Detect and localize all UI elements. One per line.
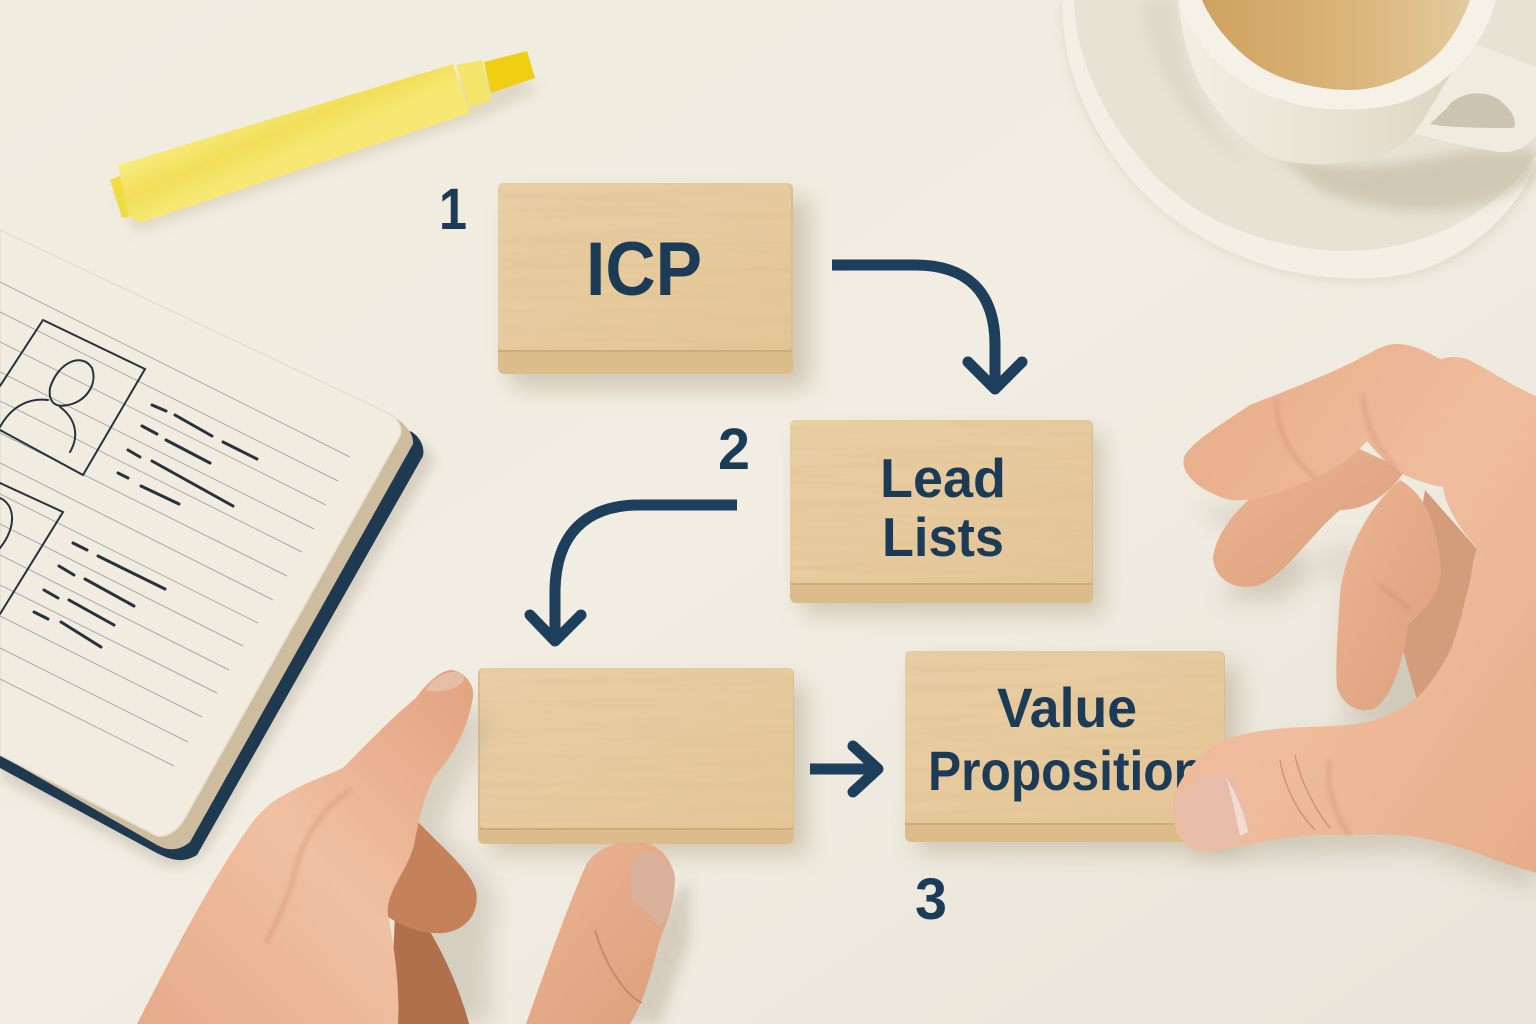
highlighter collar	[456, 60, 492, 108]
block: Value Proposition: Value	[997, 676, 1137, 739]
left middle finger	[385, 800, 477, 933]
notebook cover	[0, 431, 423, 860]
saucer and coffee cup	[1062, 0, 1536, 281]
left hand back and index finger	[137, 670, 473, 1024]
notebook top page	[0, 230, 401, 836]
block: ICP	[498, 183, 810, 388]
left thumb	[526, 842, 675, 1024]
left ring finger	[390, 915, 469, 1024]
block: Lead Lists	[790, 420, 1102, 614]
index fingernail	[425, 672, 464, 692]
cup body	[1178, 0, 1496, 164]
notebook handwriting	[34, 405, 257, 647]
step number 3: 3	[915, 867, 947, 932]
arrow: blank block to Value Proposition	[810, 746, 878, 792]
highlighter end cap	[110, 176, 132, 218]
ring finger	[1336, 480, 1441, 710]
coffee surface	[1202, 0, 1470, 90]
step number 1: 1	[439, 177, 467, 242]
thumb nail, right hand	[1175, 776, 1250, 848]
step number 2: 2	[718, 417, 750, 482]
saucer	[1063, 0, 1536, 279]
hand: left	[137, 670, 690, 1024]
left thumb shadow	[600, 880, 690, 1024]
highlighter nib	[484, 51, 535, 93]
notebook page edges	[0, 418, 413, 849]
fourth finger in gap	[1400, 490, 1478, 700]
cup lip	[1178, 0, 1496, 110]
block: blank	[478, 668, 806, 854]
highlighter barrel	[118, 64, 470, 222]
block: Value Proposition	[905, 651, 1239, 852]
middle finger	[1213, 440, 1405, 587]
cup shadow on saucer	[1270, 150, 1536, 211]
notebook with sketches	[0, 230, 435, 867]
left thumb nail	[630, 852, 675, 928]
handle	[1413, 42, 1536, 152]
block: ICP: ICP	[586, 227, 702, 312]
hand shadow	[1190, 510, 1536, 890]
block: Value Proposition: Proposition	[928, 739, 1204, 802]
arrow: Lead Lists to blank block	[530, 505, 737, 641]
knuckle creases, right hand	[1277, 395, 1410, 835]
hand shadow	[400, 700, 495, 1024]
arrow: ICP to Lead Lists	[832, 265, 1022, 389]
notebook profile sketches	[0, 320, 145, 614]
notebook ruled lines	[0, 282, 350, 766]
palm, index finger and thumb	[1173, 344, 1536, 873]
block: Lead Lists: Lists	[882, 506, 1004, 568]
block: Lead Lists: Lead	[880, 447, 1006, 509]
finger crease, left hand	[266, 790, 351, 943]
hand: right	[1173, 344, 1536, 890]
icon: yellow highlighter	[110, 51, 540, 232]
